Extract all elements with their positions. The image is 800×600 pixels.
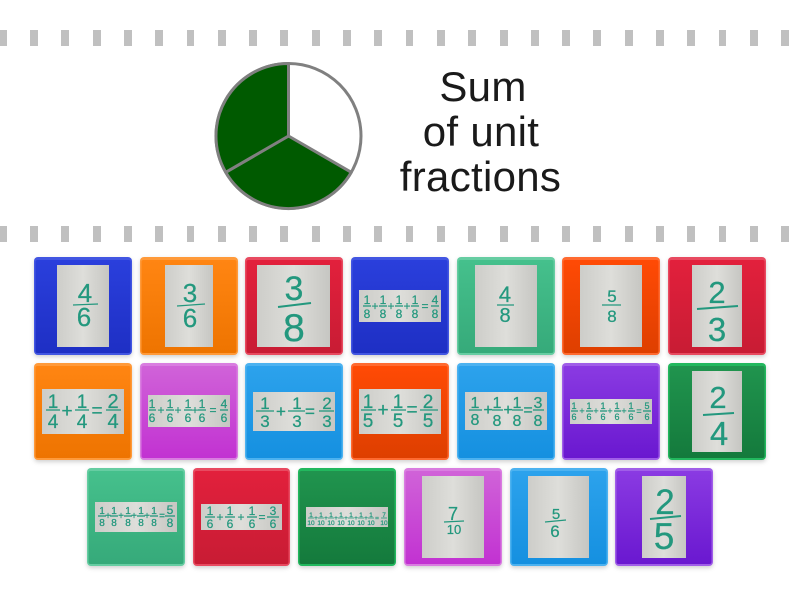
card: 1/6+1/6+1/6=3/6: 6: [207, 517, 214, 531]
card: 1/8+1/8+1/8+1/8=4/8: 1: [380, 293, 387, 307]
card: 1/8+1/8+1/8+1/8+1/8=5/8: [87, 468, 185, 566]
card: seven times 1/10 = 7/10: 7: [382, 512, 386, 519]
card: 1/6+1/6+1/6+1/6=4/6: =: [209, 403, 217, 417]
card: 1/8+1/8+1/8+1/8=4/8: 8: [380, 307, 387, 321]
card: 1/6+1/6+1/6+1/6=4/6: 6: [199, 411, 206, 425]
card: 1/8+1/8+1/8+1/8=4/8: +: [371, 299, 379, 313]
card: 1/8+1/8+1/8+1/8=4/8: 8: [412, 307, 419, 321]
card: 1/8+1/8+1/8+1/8+1/8=5/8: +: [131, 511, 137, 522]
card: 1/8+1/8+1/8+1/8+1/8=5/8: +: [118, 511, 124, 522]
card: 1/3+1/3=2/3: 3: [260, 412, 270, 431]
card: 1/8+1/8+1/8+1/8+1/8=5/8: 1: [99, 506, 105, 517]
card: 3/6: [140, 257, 238, 355]
card: 1/4+1/4=2/4: 4: [48, 412, 59, 433]
card: 1/8+1/8+1/8+1/8+1/8=5/8: 1: [125, 506, 131, 517]
card: 7/10: [404, 468, 502, 566]
card: 1/8+1/8+1/8+1/8+1/8=5/8: 5: [167, 503, 174, 517]
card: 1/3+1/3=2/3: [245, 363, 343, 460]
card: 1/4+1/4=2/4: 4: [107, 411, 119, 433]
card: seven times 1/10 = 7/10: 1: [319, 512, 323, 519]
card: 1/8+1/8+1/8+1/8+1/8=5/8: 8: [151, 518, 157, 529]
card: 1/8+1/8+1/8+1/8=4/8: +: [403, 299, 411, 313]
card: 1/6+1/6+1/6=3/6: 6: [227, 517, 234, 531]
card: 1/3+1/3=2/3: =: [305, 402, 315, 421]
card: 7/10: 10: [447, 522, 461, 537]
title: fractions: [400, 153, 561, 200]
card: 1/8+1/8+1/8+1/8=4/8: 1: [364, 293, 371, 307]
card: 1/8+1/8+1/8+1/8+1/8=5/8: 8: [138, 518, 144, 529]
title: Sum: [439, 63, 527, 110]
card: 4/6: 4: [78, 278, 92, 308]
card: 1/6+1/6+1/6+1/6+1/6=5/6: +: [607, 406, 613, 416]
card: 1/5+1/5=2/5: 2: [423, 392, 433, 413]
card: 1/4+1/4=2/4: 1: [48, 392, 58, 413]
card: 4/8: 8: [499, 305, 511, 327]
card: 3/6: 3: [183, 278, 197, 308]
card: 1/6+1/6+1/6+1/6+1/6=5/6: 5: [644, 401, 650, 411]
card: 1/6+1/6+1/6=3/6: +: [237, 510, 245, 524]
card: seven times 1/10 = 7/10: +: [344, 515, 348, 522]
card: seven times 1/10 = 7/10: 10: [317, 520, 325, 527]
card: 3/6: 6: [183, 303, 197, 333]
card: 1/6+1/6+1/6=3/6: =: [258, 510, 266, 524]
card: 1/4+1/4=2/4: 4: [77, 412, 88, 433]
card: 1/6+1/6+1/6+1/6+1/6=5/6: 1: [628, 401, 634, 411]
card: seven times 1/10 = 7/10: +: [334, 515, 338, 522]
card: seven times 1/10 = 7/10: +: [354, 515, 358, 522]
card: 1/6+1/6+1/6+1/6=4/6: 6: [167, 411, 174, 425]
card: 1/8+1/8+1/8=3/8: 8: [513, 413, 522, 430]
card: 1/3+1/3=2/3: 3: [292, 412, 302, 431]
card: 1/6+1/6+1/6+1/6+1/6=5/6: 1: [600, 401, 606, 411]
card: 1/8+1/8+1/8+1/8+1/8=5/8: +: [105, 511, 111, 522]
card: 1/6+1/6+1/6+1/6=4/6: 4: [221, 397, 228, 411]
card: 1/8+1/8+1/8=3/8: 3: [534, 395, 543, 412]
card: 1/6+1/6+1/6+1/6=4/6: 1: [149, 397, 156, 411]
card: 1/8+1/8+1/8+1/8=4/8: 1: [396, 293, 403, 307]
card: 1/6+1/6+1/6=3/6: [193, 468, 290, 566]
card: 1/8+1/8+1/8+1/8+1/8=5/8: 8: [125, 518, 131, 529]
card: seven times 1/10 = 7/10: 10: [347, 520, 355, 527]
card: 1/8+1/8+1/8=3/8: 8: [471, 412, 480, 429]
card: 1/6+1/6+1/6+1/6+1/6=5/6: +: [593, 406, 599, 416]
card: 1/8+1/8+1/8=3/8: 1: [493, 395, 502, 412]
card: 4/6: 6: [77, 302, 91, 332]
card: 1/6+1/6+1/6+1/6=4/6: [140, 363, 238, 460]
card: seven times 1/10 = 7/10: 1: [309, 512, 313, 519]
card: 1/6+1/6+1/6=3/6: 6: [249, 517, 256, 531]
card: 2/3: 3: [708, 311, 726, 348]
card: 1/8+1/8+1/8+1/8+1/8=5/8: 1: [138, 506, 144, 517]
card: 2/5: 2: [655, 483, 675, 522]
card: 2/3: 2: [708, 275, 726, 310]
card: 1/6+1/6+1/6+1/6=4/6: +: [191, 403, 199, 417]
card: 1/3+1/3=2/3: 2: [322, 394, 332, 413]
card: 1/8+1/8+1/8=3/8: =: [523, 402, 533, 419]
card: 1/6+1/6+1/6+1/6+1/6=5/6: 6: [600, 412, 606, 422]
card: 1/6+1/6+1/6+1/6+1/6=5/6: 6: [571, 412, 577, 422]
card: 1/4+1/4=2/4: 2: [107, 391, 119, 413]
card: seven times 1/10 = 7/10: 10: [380, 520, 388, 527]
card: seven times 1/10 = 7/10: [298, 468, 396, 566]
card: 1/6+1/6+1/6+1/6=4/6: +: [157, 403, 165, 417]
card: 1/6+1/6+1/6+1/6+1/6=5/6: 1: [571, 401, 577, 411]
card: 1/8+1/8+1/8+1/8+1/8=5/8: 8: [167, 516, 174, 530]
card: 1/4+1/4=2/4: [34, 363, 132, 460]
card: seven times 1/10 = 7/10: 1: [359, 512, 363, 519]
card: 1/8+1/8+1/8=3/8: [457, 363, 555, 460]
card: 1/5+1/5=2/5: 5: [393, 411, 403, 432]
card: seven times 1/10 = 7/10: +: [364, 515, 368, 522]
card: 1/6+1/6+1/6=3/6: 1: [207, 504, 214, 518]
card: 1/8+1/8+1/8+1/8+1/8=5/8: =: [159, 511, 165, 522]
card: 7/10: 7: [448, 504, 458, 524]
card: seven times 1/10 = 7/10: +: [314, 515, 318, 522]
card: 1/8+1/8+1/8+1/8=4/8: [351, 257, 449, 355]
card: seven times 1/10 = 7/10: 10: [337, 520, 345, 527]
card: 1/6+1/6+1/6+1/6+1/6=5/6: 6: [644, 412, 650, 422]
card: 2/5: 5: [654, 516, 674, 557]
card: 4/8: 4: [499, 282, 511, 307]
card: 1/6+1/6+1/6+1/6=4/6: 1: [185, 397, 192, 411]
card: 1/6+1/6+1/6=3/6: 1: [249, 504, 256, 518]
card: 3/8: 8: [283, 307, 305, 350]
card: 1/6+1/6+1/6+1/6=4/6: 1: [199, 397, 206, 411]
card: 1/6+1/6+1/6+1/6=4/6: 6: [149, 411, 156, 425]
card: 3/8: [245, 257, 343, 355]
card: seven times 1/10 = 7/10: 10: [327, 520, 335, 527]
card: 1/6+1/6+1/6+1/6=4/6: 6: [185, 411, 192, 425]
card: 1/6+1/6+1/6+1/6+1/6=5/6: 1: [586, 401, 592, 411]
card: 2/4: 2: [709, 380, 727, 415]
card: 5/6: 5: [552, 506, 560, 523]
card: 1/6+1/6+1/6+1/6+1/6=5/6: 1: [614, 401, 620, 411]
card: 5/6: 6: [550, 522, 560, 541]
card: 1/5+1/5=2/5: 5: [363, 411, 373, 432]
card: 1/3+1/3=2/3: +: [276, 402, 286, 421]
card: 1/4+1/4=2/4: =: [91, 401, 103, 422]
card: seven times 1/10 = 7/10: 1: [369, 512, 373, 519]
card: 1/5+1/5=2/5: 5: [423, 411, 433, 432]
card: 1/8+1/8+1/8+1/8=4/8: 8: [432, 307, 439, 321]
card: 1/6+1/6+1/6+1/6=4/6: 6: [221, 411, 228, 425]
card: 1/6+1/6+1/6=3/6: 3: [270, 504, 277, 518]
card: 1/3+1/3=2/3: 3: [322, 412, 332, 431]
card: 1/8+1/8+1/8=3/8: 1: [471, 395, 480, 412]
card: 1/8+1/8+1/8+1/8=4/8: 8: [396, 307, 403, 321]
card: seven times 1/10 = 7/10: 1: [329, 512, 333, 519]
title: of unit: [423, 108, 539, 155]
card: 2/5: [615, 468, 713, 566]
card: seven times 1/10 = 7/10: =: [375, 515, 379, 522]
card: 1/8+1/8+1/8=3/8: 8: [493, 413, 502, 430]
card: 1/6+1/6+1/6+1/6+1/6=5/6: 6: [614, 412, 620, 422]
card: 1/6+1/6+1/6+1/6=4/6: +: [174, 403, 182, 417]
card: 4/6: [34, 257, 132, 355]
card: 1/5+1/5=2/5: +: [377, 400, 389, 421]
card: seven times 1/10 = 7/10: 10: [307, 520, 315, 527]
card: 1/8+1/8+1/8+1/8=4/8: +: [387, 299, 395, 313]
card: 1/8+1/8+1/8=3/8: 1: [513, 395, 522, 412]
card: 5/8: [562, 257, 660, 355]
card: 1/6+1/6+1/6+1/6+1/6=5/6: 6: [628, 412, 634, 422]
card: 4/8: [457, 257, 555, 355]
card: 1/8+1/8+1/8+1/8+1/8=5/8: 1: [111, 506, 117, 517]
card: seven times 1/10 = 7/10: 10: [357, 520, 365, 527]
card: 1/8+1/8+1/8+1/8+1/8=5/8: 8: [111, 518, 117, 529]
card: 5/8: 5: [607, 287, 617, 306]
card: 1/5+1/5=2/5: 1: [393, 392, 403, 413]
card: 1/6+1/6+1/6+1/6+1/6=5/6: +: [621, 406, 627, 416]
card: 1/6+1/6+1/6+1/6+1/6=5/6: +: [579, 406, 585, 416]
card: 2/4: 4: [710, 415, 728, 452]
card: 3/8: 3: [285, 270, 303, 308]
card: 1/8+1/8+1/8=3/8: 8: [534, 413, 543, 430]
card: seven times 1/10 = 7/10: +: [324, 515, 328, 522]
card: 1/6+1/6+1/6=3/6: 1: [227, 504, 234, 518]
card: 1/3+1/3=2/3: 1: [292, 394, 302, 413]
card: 1/8+1/8+1/8=3/8: +: [483, 402, 493, 419]
card: 1/3+1/3=2/3: 1: [260, 394, 270, 413]
card: 1/6+1/6+1/6=3/6: 6: [270, 517, 277, 531]
card: 1/8+1/8+1/8+1/8+1/8=5/8: +: [144, 511, 150, 522]
card: 1/8+1/8+1/8=3/8: +: [503, 402, 513, 419]
card: 2/4: [668, 363, 766, 460]
card: 1/8+1/8+1/8+1/8=4/8: 4: [432, 293, 439, 307]
card: 1/5+1/5=2/5: [351, 363, 449, 460]
card: 1/6+1/6+1/6+1/6+1/6=5/6: =: [636, 406, 642, 416]
card: 1/5+1/5=2/5: 1: [363, 392, 373, 413]
card: 1/8+1/8+1/8+1/8=4/8: 1: [412, 293, 419, 307]
card: 5/6: [510, 468, 608, 566]
card: 1/8+1/8+1/8+1/8=4/8: 8: [364, 307, 371, 321]
card: 2/3: [668, 257, 766, 355]
card: 1/6+1/6+1/6+1/6=4/6: 1: [167, 397, 174, 411]
card: seven times 1/10 = 7/10: 1: [349, 512, 353, 519]
card: seven times 1/10 = 7/10: 10: [367, 520, 375, 527]
card: 1/8+1/8+1/8+1/8+1/8=5/8: 8: [99, 518, 105, 529]
card: 1/5+1/5=2/5: =: [406, 400, 418, 421]
card: seven times 1/10 = 7/10: 1: [339, 512, 343, 519]
top dashed border: [0, 30, 789, 46]
card: 5/8: 8: [607, 307, 617, 326]
card: 1/6+1/6+1/6+1/6+1/6=5/6: [562, 363, 660, 460]
card: 1/6+1/6+1/6+1/6+1/6=5/6: 6: [586, 412, 592, 422]
card: 1/4+1/4=2/4: 1: [77, 392, 87, 413]
card: 1/4+1/4=2/4: +: [61, 401, 73, 422]
bottom dashed border: [0, 226, 789, 242]
card: 1/8+1/8+1/8+1/8+1/8=5/8: 1: [151, 506, 157, 517]
card: 1/6+1/6+1/6=3/6: +: [216, 510, 224, 524]
card: 1/8+1/8+1/8+1/8=4/8: =: [421, 299, 429, 313]
pie chart: two thirds shaded: [216, 63, 361, 209]
